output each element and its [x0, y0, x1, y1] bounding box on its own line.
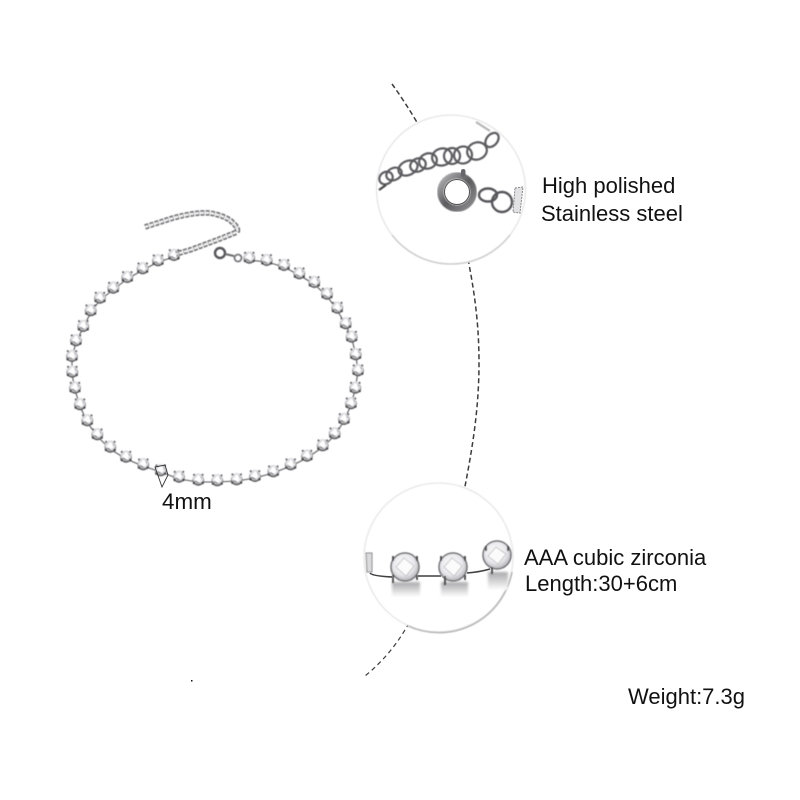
label: stones and length: AAA cubic zirconia	[524, 545, 707, 570]
label: stone size: 4mm	[162, 489, 212, 514]
prongs	[393, 546, 508, 585]
wire	[370, 569, 490, 577]
stones	[66, 249, 364, 486]
jump rings	[479, 188, 512, 212]
label: weight: Weight:7.3g	[628, 684, 745, 709]
stone fragment	[513, 187, 523, 213]
stones	[366, 541, 511, 585]
thin wire through the stones	[72, 257, 358, 482]
curb chain links	[377, 122, 501, 190]
reflections	[392, 572, 508, 597]
extension chain	[145, 213, 237, 254]
spring ring clasp	[440, 176, 474, 208]
dashed connector: lower circle out	[365, 623, 409, 676]
dashed connector: top into upper circle	[392, 84, 418, 124]
label: material: Stainless steel	[541, 201, 683, 226]
label: material: High polished	[542, 173, 675, 198]
stray dot	[191, 680, 192, 682]
label: stones and length: Length:30+6cm	[525, 571, 677, 596]
detail circle: clasp	[376, 115, 526, 264]
dashed connector: upper circle to lower circle	[464, 259, 479, 489]
size marker triangle	[155, 465, 168, 487]
clasp	[215, 248, 225, 258]
bracelet product photo	[66, 213, 364, 486]
detail circle: stones	[364, 483, 513, 633]
